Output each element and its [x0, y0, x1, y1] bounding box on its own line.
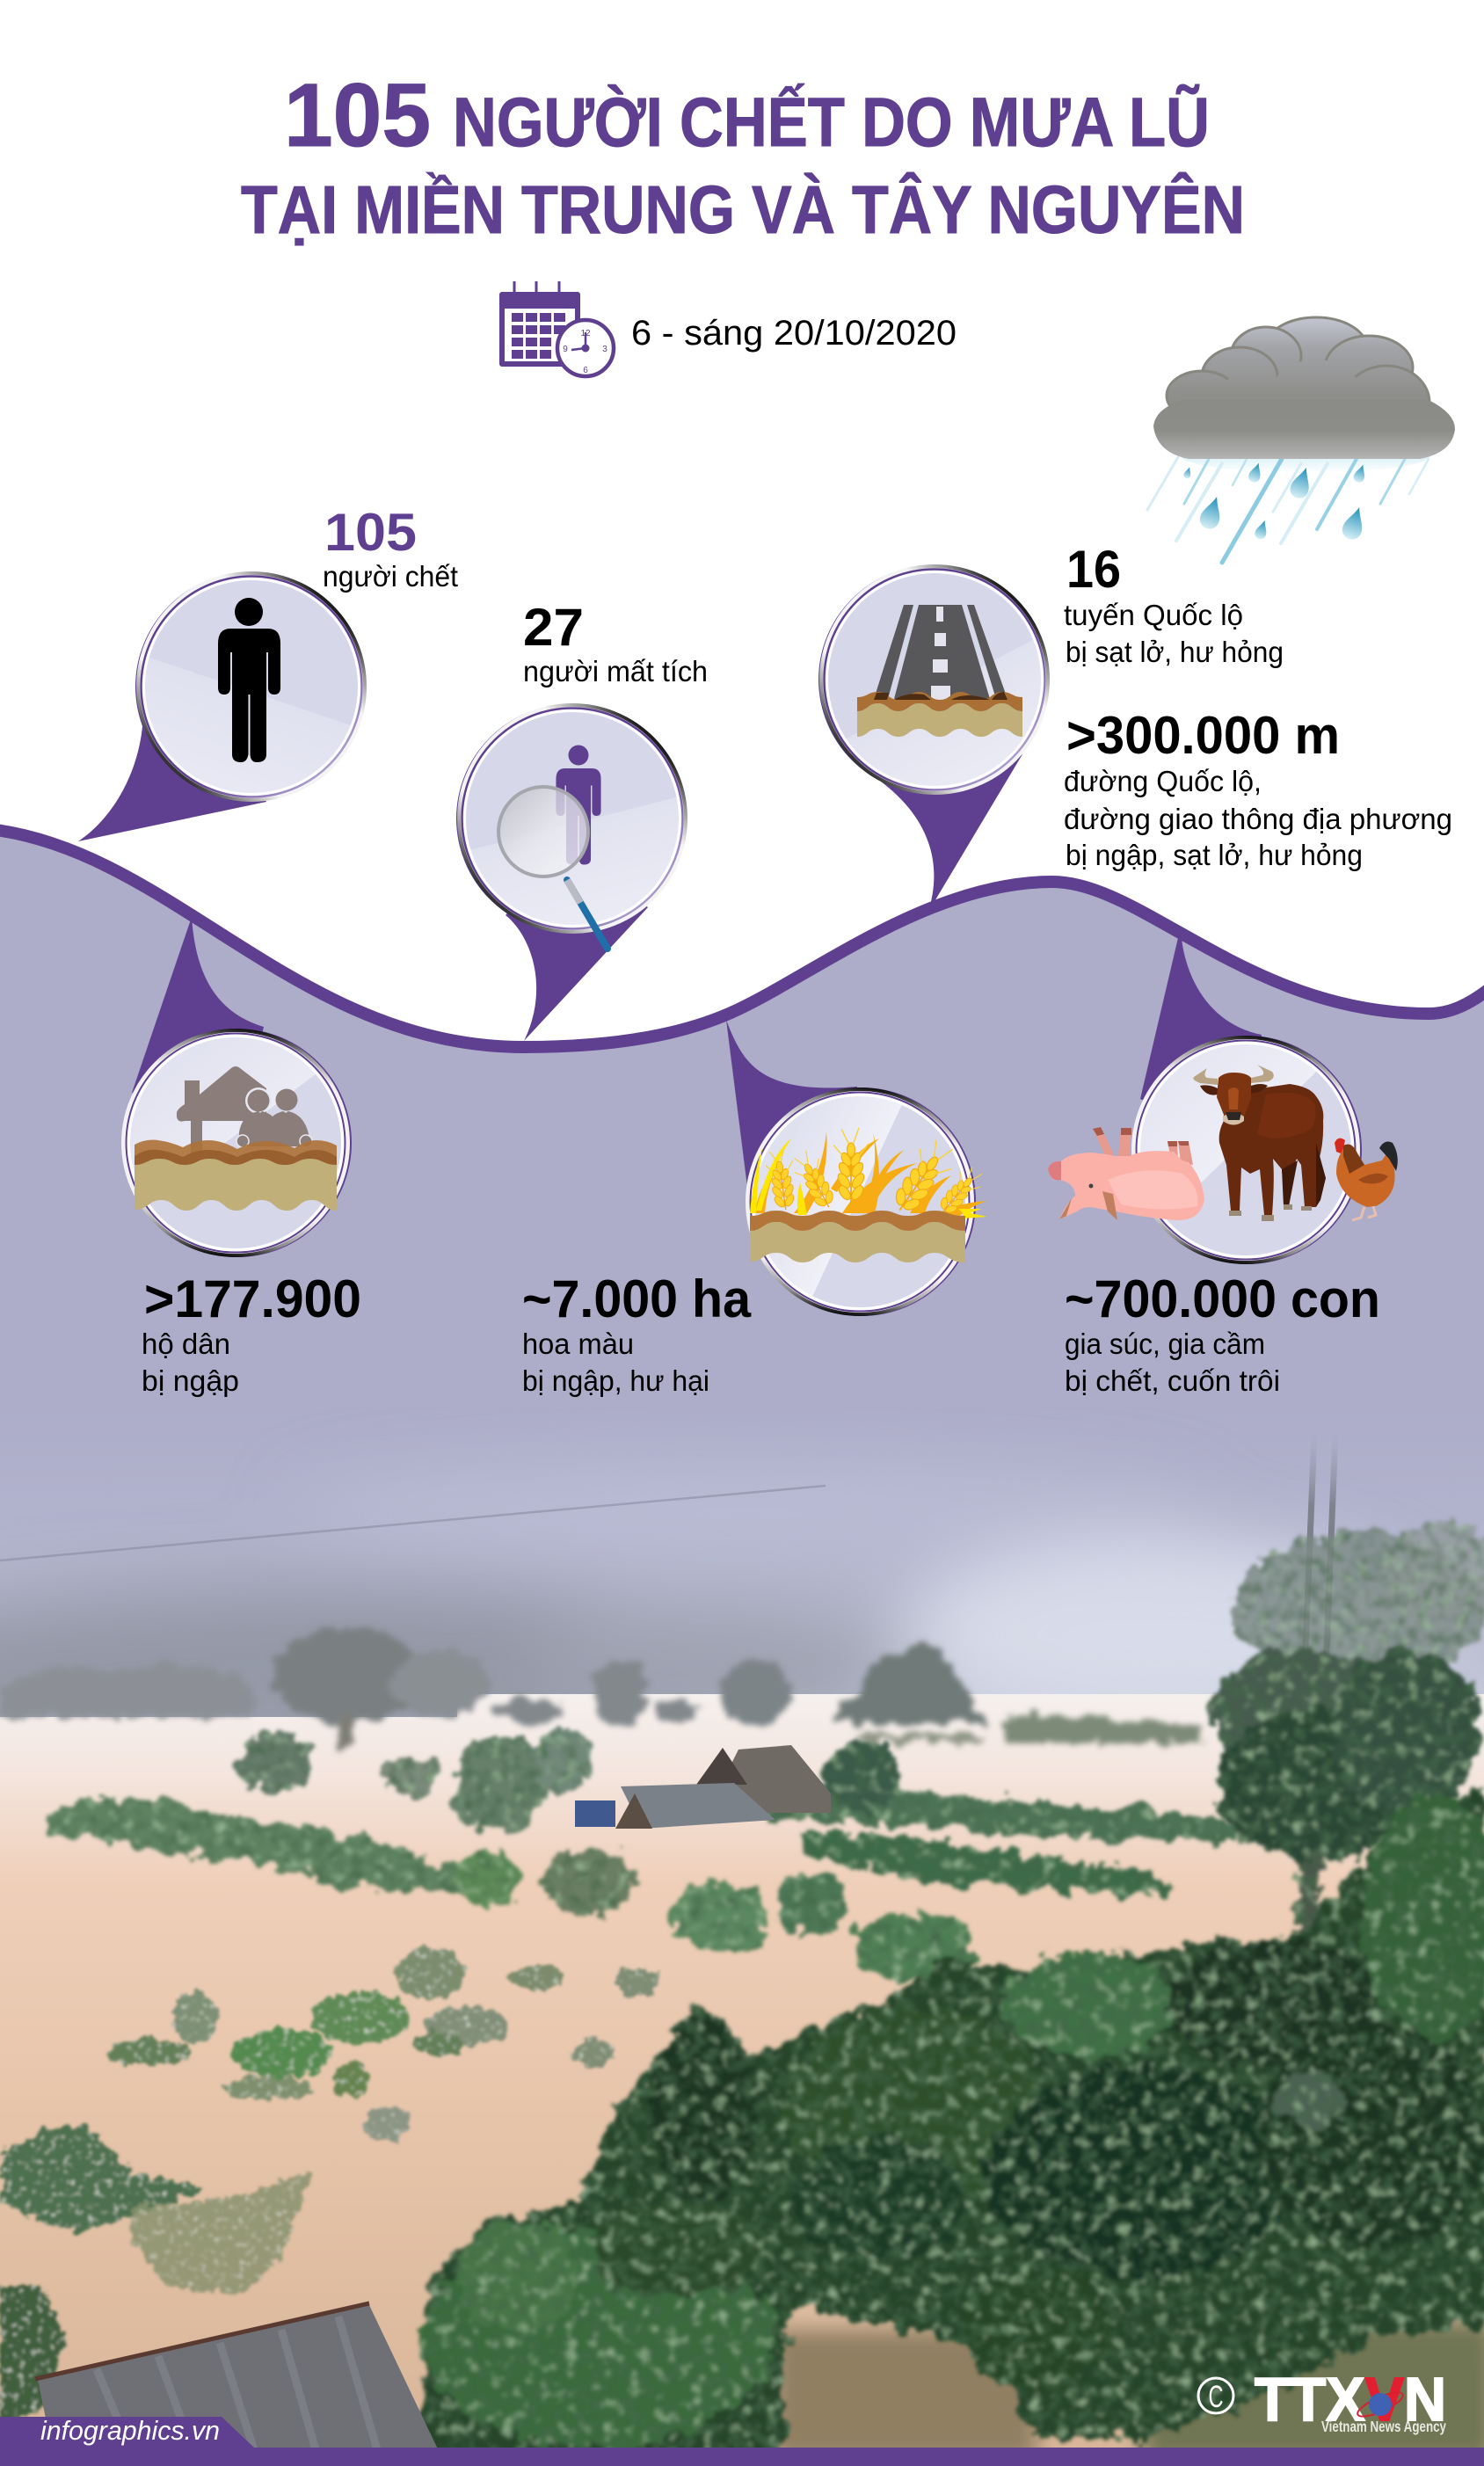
- footer tab: infographics.vn: infographics.vn: [40, 2415, 220, 2446]
- stat: roads: tuyến Quốc lộ: [1064, 599, 1243, 631]
- stat: 27 missing: [523, 598, 708, 687]
- stat: roads: [1064, 540, 1452, 871]
- stat: 27 missing: người mất tích: [523, 655, 708, 687]
- stat: livestock: gia súc, gia cầm: [1065, 1328, 1265, 1360]
- icon: flooded house and people: [135, 1066, 337, 1211]
- photo: flooded village: [0, 1407, 1484, 2462]
- panel: pin crops: [726, 1020, 987, 1316]
- banana plants left: [0, 2128, 312, 2426]
- stat: 105 dead: [323, 503, 458, 593]
- stat: livestock: [1065, 1269, 1380, 1397]
- icon: calendar and clock: [499, 281, 614, 376]
- stat: livestock: bị chết, cuốn trôi: [1065, 1364, 1280, 1397]
- stat: roads: 16: [1066, 540, 1121, 599]
- footer tab: infographics.vn: [0, 2415, 255, 2448]
- panel: pin roads: [818, 565, 1048, 912]
- small flooded bushes: [107, 1947, 660, 2141]
- icon: calendar and clock: 12: [580, 329, 591, 338]
- logo: TTXVN: Vietnam News Agency: [1321, 2418, 1446, 2435]
- icon: magnifier: [498, 787, 607, 949]
- logo: TTXVN: TTXVN: [1255, 2365, 1446, 2433]
- mid vegetation and trees: [44, 1728, 1240, 1981]
- icon: rain cloud: [1147, 317, 1455, 563]
- stat: houses: >177.900: [144, 1269, 361, 1328]
- icon: calendar and clock: 9: [563, 345, 568, 354]
- panel: pin missing: [456, 704, 686, 1041]
- stat: crops: bị ngập, hư hại: [522, 1364, 709, 1397]
- icon: damaged road: [857, 605, 1022, 737]
- bottom bar: [0, 2448, 1484, 2466]
- stat: roads: đường Quốc lộ,: [1064, 765, 1262, 797]
- icon: chicken: [1335, 1138, 1398, 1220]
- stat: 105 dead: người chết: [323, 560, 458, 593]
- bottom water tone: [774, 2321, 1484, 2462]
- icon: cow: [1193, 1065, 1326, 1221]
- icon: person: [218, 598, 280, 762]
- icon: calendar and clock: 6: [583, 366, 588, 375]
- far tree line: [0, 1626, 1201, 1749]
- icon: person purple: [556, 746, 601, 864]
- icon: pig: [1048, 1127, 1204, 1220]
- foreground trees: [417, 1785, 1484, 2462]
- panel: pin livestock: [1048, 927, 1398, 1264]
- stat: crops: ~7.000 ha: [522, 1269, 752, 1328]
- stat: crops: [522, 1269, 752, 1397]
- stat: roads: đường giao thông địa phương: [1064, 803, 1452, 835]
- icon: calendar and clock: 3: [602, 345, 607, 354]
- panel: lavender wave area: [0, 830, 1484, 1442]
- roof in foreground: [35, 2303, 440, 2453]
- logo: TTXVN: C: [1208, 2380, 1224, 2414]
- stat: houses: hộ dân: [142, 1328, 230, 1360]
- title: TẠI MIỀN TRUNG VÀ TÂY NGUYÊN: [241, 171, 1245, 248]
- right-side tree: [1209, 1521, 1484, 1952]
- panel: pin people dead: [78, 572, 365, 841]
- stat: roads: >300.000 m: [1066, 706, 1340, 765]
- stat: houses: bị ngập: [142, 1364, 239, 1397]
- icon: wheat: [750, 1128, 987, 1262]
- date text: 6 - sáng 20/10/2020: [631, 314, 957, 353]
- stat: 105 dead: 105: [324, 503, 417, 562]
- stat: roads: bị ngập, sạt lở, hư hỏng: [1066, 839, 1363, 871]
- stat: houses: [142, 1269, 361, 1397]
- panel: pin houses: [123, 917, 352, 1257]
- stat: 27 missing: 27: [523, 598, 584, 657]
- flooded houses: [575, 1745, 831, 1829]
- stat: livestock: ~700.000 con: [1065, 1269, 1380, 1328]
- stat: crops: hoa màu: [522, 1328, 634, 1360]
- title: [241, 65, 1245, 248]
- title: 105: [284, 65, 431, 165]
- title: NGƯỜI CHẾT DO MƯA LŨ: [453, 83, 1210, 161]
- stat: roads: bị sạt lở, hư hỏng: [1066, 636, 1284, 668]
